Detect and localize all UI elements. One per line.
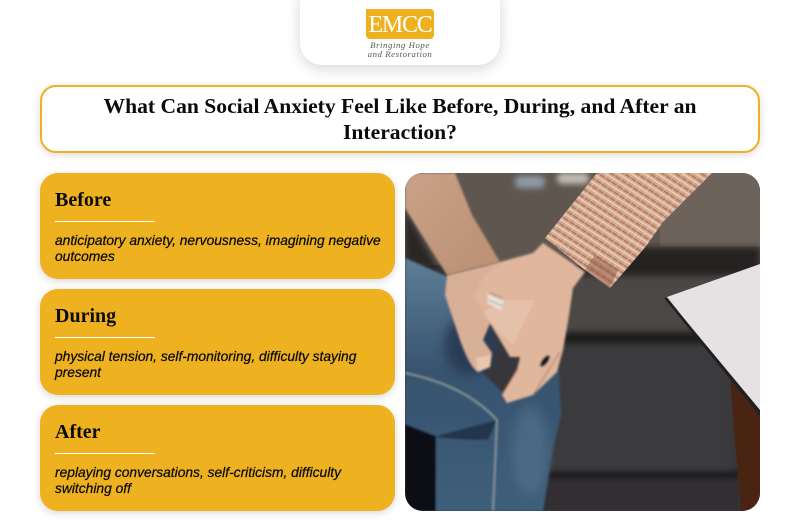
- title: What Can Social Anxiety Feel Like Before, During, and After an Interaction?: [103, 94, 697, 144]
- jeans leg: [405, 258, 561, 511]
- brown table leg: [730, 380, 760, 511]
- clasped hands: [445, 243, 585, 403]
- man's forearm: [405, 173, 500, 275]
- panel: before: [40, 173, 395, 279]
- logo tagline: [368, 40, 432, 59]
- panel: during: [40, 289, 395, 395]
- white paper: [664, 264, 760, 416]
- logo tagline: Bringing Hope: [370, 40, 430, 50]
- text: before: anticipatory anxiety, nervousness, imagining negative outcomes: [55, 233, 381, 264]
- logo card: [300, 0, 500, 65]
- panel: after: [40, 405, 395, 511]
- logo mark: EMCC: EMCC: [368, 12, 432, 38]
- photo: clasped hands on knee: [405, 173, 760, 511]
- background wall and table: [405, 173, 760, 511]
- heading: before: Before: [55, 189, 111, 211]
- title: [40, 85, 760, 153]
- text: after: replaying conversations, self-criticism, difficulty switching off: [55, 465, 341, 496]
- plaid sleeve: [545, 173, 712, 288]
- text: during: physical tension, self-monitoring, difficulty staying present: [55, 349, 356, 380]
- heading: during: During: [55, 305, 116, 327]
- logo tagline: and Restoration: [368, 49, 432, 59]
- heading: after: After: [55, 421, 101, 443]
